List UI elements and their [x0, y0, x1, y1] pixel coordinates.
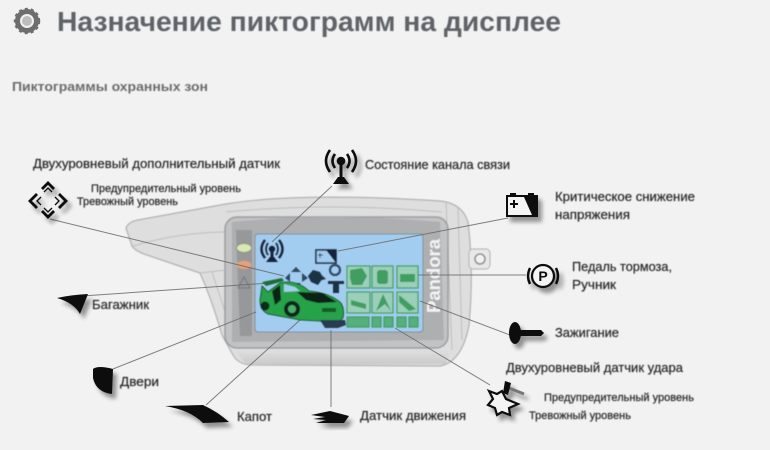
- fob body: [126, 197, 471, 366]
- callout: ignition: [509, 322, 619, 344]
- callout: brake and handbrake: [528, 259, 672, 292]
- icon: key: [509, 322, 544, 344]
- callout: hood: [165, 405, 272, 424]
- callout: trunk: [57, 294, 149, 314]
- fob lower edge: [236, 348, 450, 365]
- callout: dual-level extra sensor: [30, 156, 280, 217]
- key fob device: [126, 197, 490, 366]
- icon: gear: [15, 9, 39, 33]
- icon: hood: [165, 405, 229, 423]
- Pandora brand: Pandora: [423, 238, 444, 313]
- screen icon: car: [260, 278, 344, 322]
- screen icon: shock, parking, key: [308, 265, 344, 293]
- callout: low voltage: [507, 189, 695, 222]
- screen icon: green tile grid: [347, 266, 418, 327]
- icon: four-direction diamond: [30, 183, 66, 217]
- fob inner contours: [133, 203, 462, 350]
- icon: antenna: [326, 150, 356, 184]
- callout: doors: Двери: [120, 374, 159, 389]
- heading: Двухуровневый дополнительный датчик: [33, 156, 280, 171]
- callout: brake and handbrake: Педаль тормоза,: [572, 259, 672, 274]
- screen icon: motion sensor: [320, 320, 346, 328]
- icon: parking brake: [528, 265, 558, 287]
- display screen: [255, 234, 423, 332]
- callout: brake and handbrake: Ручник: [572, 277, 616, 292]
- callout: dual-level shock sensor: Двухуровневый датчик удара: [506, 360, 684, 375]
- leader lines: [50, 186, 526, 407]
- icon: motion sensor: [311, 411, 349, 423]
- callout: hood: Капот: [237, 409, 272, 424]
- callout: low voltage: напряжения: [555, 207, 630, 222]
- subtitle: Пиктограммы охранных зон: [12, 80, 208, 94]
- callout: link status: Состояние канала связи: [365, 157, 510, 172]
- screen icon: antenna: [262, 240, 282, 262]
- icon: hammer and burst: [488, 381, 524, 415]
- icon: door: [93, 367, 113, 394]
- warning level: Предупредительный уровень: [91, 183, 241, 195]
- fob lanyard loop: [469, 249, 490, 269]
- callout: dual-level shock sensor: Тревожный уровень: [529, 410, 631, 422]
- callout: ignition: Зажигание: [555, 325, 619, 340]
- screen icon: sensor diamonds: [285, 267, 308, 288]
- callout: motion sensor: [311, 408, 466, 423]
- indicator lights: [236, 244, 252, 288]
- callout: link status: [326, 150, 510, 184]
- alarm level: Тревожный уровень: [77, 196, 178, 208]
- callout: low voltage: Критическое снижение: [555, 189, 695, 204]
- callout: doors: [93, 367, 159, 394]
- screen icon: tile glyphs: [350, 268, 416, 311]
- bezel: [225, 217, 448, 348]
- callout: motion sensor: Датчик движения: [360, 408, 466, 423]
- display icons: [260, 240, 418, 328]
- callout: dual-level shock sensor: Предупредительный уровень: [544, 392, 694, 404]
- icon: battery: [507, 193, 537, 216]
- screen icon: battery: [316, 250, 336, 263]
- icon: trunk: [57, 294, 88, 314]
- callout: dual-level shock sensor: [488, 360, 694, 422]
- icon: parking brake: P: [538, 268, 548, 284]
- title: Назначение пиктограмм на дисплее: [57, 6, 561, 37]
- callout: trunk: Багажник: [92, 297, 149, 312]
